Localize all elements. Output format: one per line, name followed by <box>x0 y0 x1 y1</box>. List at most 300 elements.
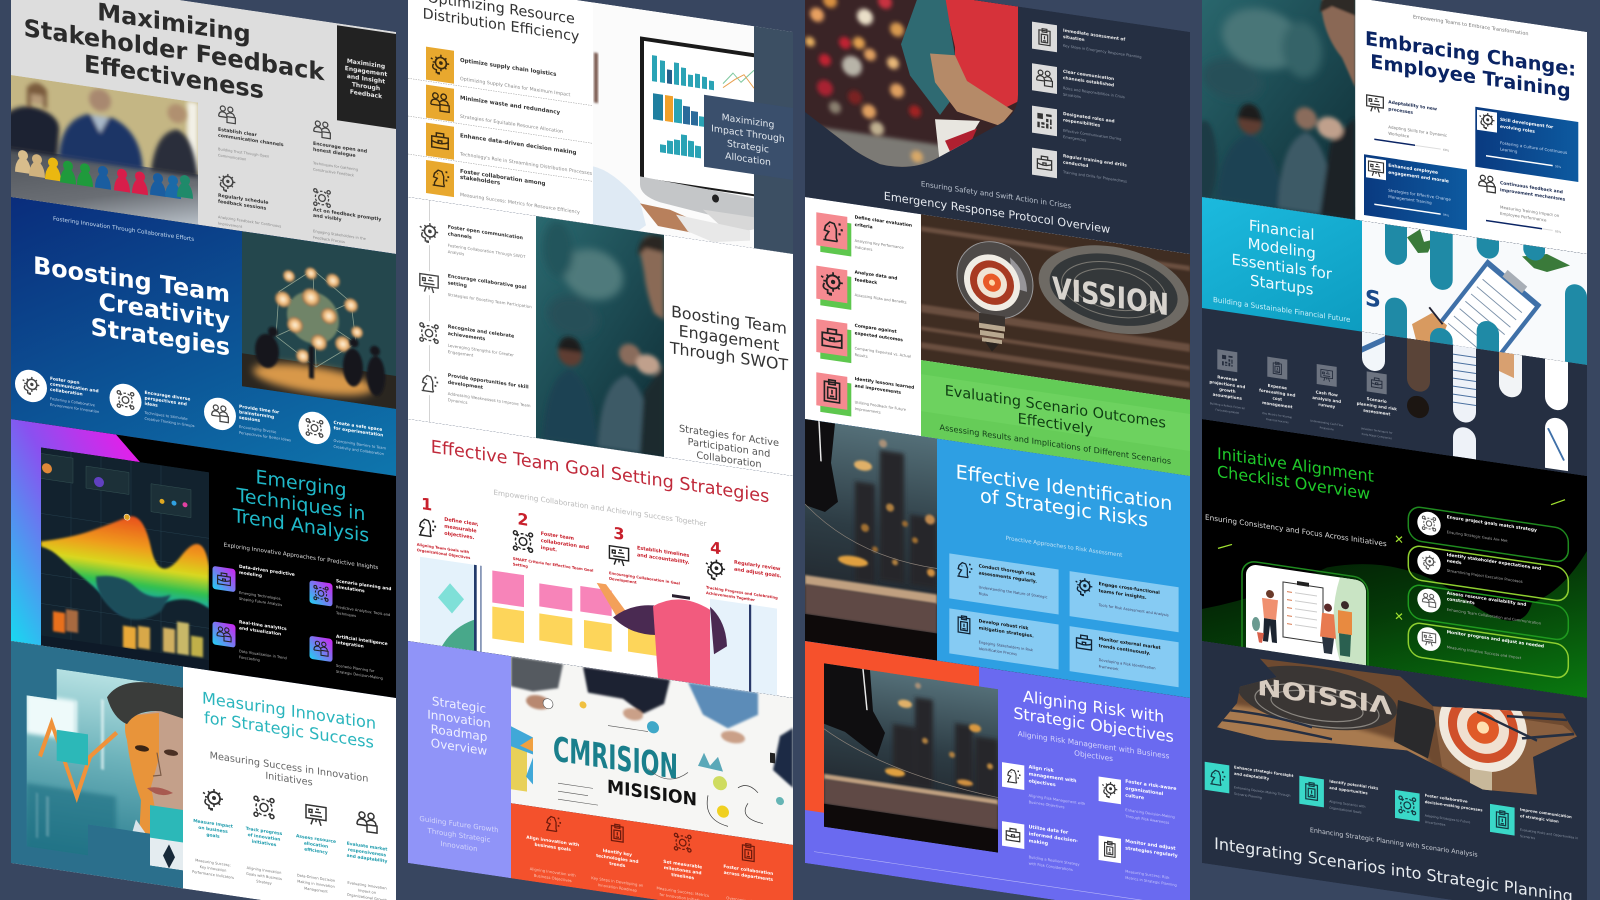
slide: Maximizing Stakeholder Feedback Effectiveness <box>6 0 396 254</box>
photo: city bridge at night <box>824 663 998 853</box>
item: act on feedback promptly and visibly: Engaging Stakeholders in the <box>313 229 366 241</box>
item 3: timelines <box>671 872 695 881</box>
title: Techniques in <box>236 484 365 525</box>
slide: Boosting Team Engagement Through SWOT <box>408 197 793 476</box>
item 2 <box>246 795 283 887</box>
item 2: Foster a risk-aware <box>1125 780 1176 792</box>
item: establish clear communication channels: Communication <box>218 153 246 162</box>
item 1: Enhance strategic foresight <box>1234 764 1293 778</box>
step 3: Development <box>609 577 637 585</box>
teal left panel <box>11 641 183 888</box>
subtitle: Measuring Success in Innovation <box>210 750 368 785</box>
card 2 <box>1070 571 1179 632</box>
item: act on feedback promptly and visibly <box>313 188 381 250</box>
item 4: Strategic Decision-Making <box>336 670 383 681</box>
item 1 <box>1209 348 1245 416</box>
step 4 <box>706 537 782 606</box>
card 4: Monitor external market <box>1099 637 1161 651</box>
slide: Effective Identification of Strategic Risks <box>805 419 1190 698</box>
subtitle: Enhancing Strategic Planning with Scenario Analysis <box>1310 826 1478 859</box>
card 3: Engaging Stakeholders in Risk <box>979 640 1033 652</box>
item 1 <box>1205 760 1294 804</box>
card 1: assessments regularly. <box>979 570 1037 585</box>
item 4: Foster collaboration among <box>460 169 545 187</box>
item 2: Techniques <box>335 611 356 618</box>
doodle word: CMRISION: CMRISION <box>553 729 678 788</box>
item 2: Aligning Scenarios with <box>1329 799 1365 809</box>
check pill 3 <box>1408 584 1568 641</box>
slide background <box>1202 641 1587 900</box>
item 3: Encouraging Diverse <box>239 425 276 434</box>
item: encourage open and honest dialogue <box>312 120 367 180</box>
subtitle: Objectives <box>1074 748 1113 763</box>
title: Checklist Overview <box>1217 462 1370 503</box>
item 3 <box>296 803 336 895</box>
item 1: goals <box>206 832 220 840</box>
slide background <box>1202 197 1587 476</box>
item 3: runway <box>1318 402 1335 409</box>
item 1 <box>212 564 294 606</box>
photo: city bridge at night <box>805 419 937 661</box>
item 1: projections and <box>1209 379 1245 389</box>
cyan title panel <box>1202 197 1362 332</box>
slide background <box>1202 0 1587 254</box>
title: Strategic Objectives <box>1013 703 1174 746</box>
item 1: Shaping Future Analysis <box>239 597 282 607</box>
orange accent <box>805 641 979 836</box>
item 4: Scenarios <box>1520 834 1535 840</box>
card 4: Developing a Risk Identification <box>1099 658 1156 670</box>
title: Strategic <box>432 694 486 716</box>
item 4 <box>426 160 580 216</box>
item 1: criteria <box>855 222 873 231</box>
item 3: Making in Innovation <box>297 879 335 889</box>
title: Strategies <box>91 313 230 361</box>
column 4 of slides <box>1193 0 1587 900</box>
card 3: Identification Process <box>979 647 1017 656</box>
step 3: 3 <box>613 523 625 544</box>
item 1 <box>417 219 526 266</box>
item 2: management <box>1262 400 1293 409</box>
subtitle: Fostering Innovation Through Collaborative Efforts <box>53 215 194 243</box>
item 1: Business Objectives <box>1029 800 1065 809</box>
item 4: assessment <box>1363 408 1390 417</box>
check pill 4 <box>1408 622 1568 679</box>
illustration: person at sticky-note board <box>420 556 777 696</box>
card 4: Employee Performance <box>1500 211 1547 223</box>
card 1 <box>1367 95 1450 153</box>
item 1: Building a Robust Financial <box>1210 402 1245 410</box>
item 2 <box>110 382 195 428</box>
item: encourage open and honest dialogue: Encourage open and <box>313 142 367 155</box>
item 3: Foster collaborative <box>1425 793 1468 804</box>
slide: Effective Team Goal Setting Strategies <box>408 419 793 698</box>
item 2: Creative Thinking in Groups <box>144 417 195 428</box>
item 2 <box>1032 63 1125 106</box>
callout: maximizing impact <box>704 95 793 180</box>
green title band <box>921 360 1190 476</box>
item 4: and improvements <box>855 383 901 396</box>
card 3: Develop robust risk <box>979 619 1028 632</box>
item 3: making <box>1029 838 1048 847</box>
photo: blurred team with pointing man <box>536 216 664 457</box>
illustration: team with checklist <box>1242 560 1368 702</box>
item 2: setting <box>448 280 467 289</box>
item 4: development <box>448 380 484 391</box>
item 3: Engagement <box>448 349 474 358</box>
item 2: Assessing Risks and Benefits <box>855 293 907 305</box>
item 1: Foster open <box>50 377 79 386</box>
item 2: trends <box>609 861 626 869</box>
item 3: milestones and <box>664 865 702 876</box>
title <box>35 256 230 355</box>
subtitle: Participation and <box>688 437 770 460</box>
title: Boosting Team <box>671 302 787 338</box>
item 3: achievements <box>448 331 485 342</box>
item 3 <box>204 396 291 442</box>
card 3: Management Training <box>1388 194 1432 205</box>
step 2: SMART Criteria for Effective Team Goal <box>513 557 593 573</box>
subtitle: Innovation <box>440 840 478 853</box>
step 4: 4 <box>710 538 721 558</box>
subtitle: Ensuring Consistency and Focus Across Initiatives <box>1205 512 1387 548</box>
card 3: Strategies for Effective Change <box>1388 188 1451 202</box>
check pill 2: Streamlining Project Execution Processes <box>1447 569 1523 584</box>
item 3: Real-time analytics <box>239 620 287 632</box>
item 4: Evaluating Innovation <box>347 881 387 891</box>
step 3 <box>609 523 690 593</box>
item 4: Scenario <box>1367 396 1387 404</box>
item 3: informed decision- <box>1029 831 1078 844</box>
title: Through SWOT <box>669 338 788 375</box>
item 1: Data-driven predictive <box>239 565 295 578</box>
teal accent squares <box>57 730 183 842</box>
item 1: Key Steps in Emergency Response Planning <box>1063 44 1142 59</box>
item 3: with Risk Considerations <box>1029 861 1073 872</box>
title: Overview <box>431 736 487 758</box>
item 4 <box>347 810 387 900</box>
item 4 <box>1357 370 1397 441</box>
subtitle: Initiatives <box>265 771 313 789</box>
card 4 <box>1070 626 1179 687</box>
item 4 <box>723 840 773 900</box>
card 2 <box>1475 107 1578 182</box>
item: establish clear communication channels: Establish clear <box>218 128 257 138</box>
title: Engagement <box>679 321 779 355</box>
dark subtitle box: Through <box>352 81 380 92</box>
item: encourage open and honest dialogue: honest dialogue <box>313 147 356 159</box>
item 1: and adaptability <box>1234 771 1270 781</box>
item 2: Key Metrics for Startup <box>1262 412 1292 419</box>
item 3: sessions <box>239 415 260 424</box>
item 4: Evaluating Risks and Opportunities in <box>1520 828 1578 840</box>
item 3: efficiency <box>304 846 328 856</box>
item 1: collaboration <box>50 387 83 398</box>
item: act on feedback promptly and visibly: and visibly <box>313 213 342 223</box>
card 4: Continuous feedback and <box>1500 181 1563 195</box>
card 2: Fostering a Culture of Continuous <box>1500 140 1567 155</box>
card 2: 95% <box>1555 164 1562 169</box>
item 1: assumptions <box>1213 392 1242 401</box>
item 1: Fostering a Collaborative <box>50 397 95 407</box>
callout: maximizing impact: Maximizing <box>722 112 774 131</box>
title: Effectiveness <box>84 50 264 104</box>
item 2: Key Steps in Developing an <box>591 875 643 888</box>
callout: maximizing impact: Impact Through <box>711 123 785 145</box>
dashed row dividers <box>408 78 593 181</box>
photo: target bulb and VISSION sign on wood <box>921 214 1190 400</box>
item 1 <box>15 368 99 414</box>
slide: Boosting Team Creativity Strategies <box>11 197 396 476</box>
doodle sketches <box>543 695 784 835</box>
item 2 <box>591 821 644 894</box>
item 4: Early-Stage Companies <box>1362 433 1392 440</box>
item: regularly schedule feedback sessions: Regularly schedule <box>218 194 268 206</box>
card 2: evolving roles <box>1500 124 1535 135</box>
item 4: Regular training and drills <box>1063 154 1127 169</box>
item 3: Measuring Success: Metrics <box>656 885 709 898</box>
item 4: of strategic vision <box>1520 813 1559 824</box>
photo: glowing bulb sculpture <box>242 231 396 409</box>
slide: Initiative Alignment Checklist Overview <box>1202 419 1587 734</box>
item 1: growth <box>1219 387 1236 394</box>
item 4 <box>417 368 531 414</box>
item 4: conducted <box>1063 159 1088 169</box>
item 2: Encourage diverse <box>144 391 190 403</box>
check pill 2: needs <box>1447 558 1462 566</box>
card 1: 60% <box>1443 148 1450 153</box>
item 2: Strategy <box>256 879 273 886</box>
dark subtitle box <box>337 25 396 129</box>
item 3: Forecasting <box>239 655 260 662</box>
item 4: Artificial intelligence <box>336 635 388 647</box>
item: encourage open and honest dialogue: Techniques for Gathering <box>313 161 358 172</box>
item 3 <box>816 317 911 372</box>
item 4 <box>816 370 914 426</box>
slide background <box>11 197 396 476</box>
column 3 of slides <box>805 0 1190 900</box>
title: Employee Training <box>1370 50 1571 103</box>
subtitle: Empowering Teams to Embrace Transformation <box>1413 14 1528 37</box>
step 1: Define clear, <box>444 517 479 528</box>
check pill 4: Monitor progress and adjust as needed <box>1447 629 1544 650</box>
item 3: Cash flow <box>1316 389 1338 398</box>
green glow shape <box>1202 494 1587 698</box>
chart illustration <box>33 446 209 670</box>
card 1: Workplace <box>1388 131 1410 139</box>
step 2 <box>513 508 593 578</box>
title: of Strategic Risks <box>980 484 1148 532</box>
item 3: Adapting Strategies to Future <box>1425 814 1470 824</box>
dark subtitle box: Feedback <box>350 89 383 100</box>
item 4: Create a safe space <box>334 421 382 433</box>
item 4: Impact on <box>358 888 376 895</box>
item 4: Overcoming Barriers to Team <box>334 439 386 450</box>
card 4 <box>1479 175 1566 235</box>
item 4 <box>298 410 386 457</box>
timeline line <box>428 200 431 422</box>
title: Emergency Response Protocol Overview <box>884 190 1110 236</box>
item: establish clear communication channels <box>218 105 284 160</box>
step 1: Organizational Objectives <box>417 548 471 560</box>
item 4: Identify lessons learned <box>855 377 914 391</box>
item 4: Improvements <box>855 407 881 415</box>
item 1: communication and <box>50 381 99 394</box>
item 2: Scenario planning and <box>336 579 391 592</box>
item 2: Roles and Responsibilities in Crisis <box>1063 86 1125 99</box>
slide: Evaluating Scenario Outcomes Effectively <box>805 197 1190 476</box>
slide: Financial Modeling Essentials for Startups <box>1202 197 1587 476</box>
item 1: Key Innovation <box>200 865 226 873</box>
subtitle: Building a Sustainable Financial Future <box>1213 295 1350 324</box>
title: Essentials for <box>1231 250 1333 283</box>
photo: iMac dashboard <box>593 2 754 248</box>
slide background <box>11 641 396 900</box>
card 4: improvement mechanisms <box>1500 187 1566 203</box>
item 4: Addressing Weaknesses to Improve Team <box>448 391 531 408</box>
item 1: Immediate assessment of <box>1063 29 1125 43</box>
item 1: Fostering Collaboration Through SWOT <box>448 243 525 259</box>
item 3: analysis and <box>1312 395 1341 404</box>
item 1: on business <box>198 825 228 835</box>
item: regularly schedule feedback sessions <box>218 174 281 228</box>
title: Effective Team Goal Setting Strategies <box>431 437 769 507</box>
item 1: Enhancing Decision-Making Through <box>1234 785 1290 798</box>
item 4: Creativity and Collaboration <box>334 445 384 456</box>
item 2: simulations <box>336 584 365 594</box>
item 4: Utilizing Feedback for Future <box>855 400 906 412</box>
brush-stroke photo: flipped VISSION and target <box>1202 641 1587 818</box>
slide: Emergency Response Protocol Overview <box>805 0 1190 254</box>
title: Initiative Alignment <box>1217 444 1374 486</box>
title: Aligning Risk with <box>1023 687 1164 727</box>
item 2: organizational <box>1125 786 1164 797</box>
item 4: Metrics in Strategic Planning <box>1125 876 1177 887</box>
step 1: 1 <box>421 494 432 515</box>
item 1: Optimizing Supply Chains for Maximum Impact <box>460 76 571 98</box>
item 4: planning and risk <box>1357 401 1397 412</box>
dark subtitle box: and Insight <box>347 73 385 86</box>
title: Financial <box>1249 216 1315 244</box>
item 2 <box>426 85 563 138</box>
step 1: Aligning Team Goals with <box>417 543 469 554</box>
item 3: expected outcomes <box>855 330 903 343</box>
item 3: Uncertainties <box>1425 820 1446 827</box>
item 1 <box>526 813 579 884</box>
title: Emerging <box>255 466 347 502</box>
slide background <box>805 0 1190 254</box>
item 2: initiatives <box>252 839 277 848</box>
card 4: trends continuously. <box>1099 643 1151 657</box>
item 2: technologies and <box>596 853 639 865</box>
item 2: feedback <box>855 277 877 286</box>
item 4: Monitor and adjust <box>1125 839 1176 852</box>
step 2: Foster team <box>541 531 574 542</box>
item 4: Evaluate market <box>347 842 387 853</box>
slide: Aligning Risk with Strategic Objectives <box>805 641 1190 900</box>
check pill 1 <box>1408 506 1568 563</box>
card 3: Enhanced employee <box>1388 164 1438 176</box>
neon gradient accent <box>11 419 140 660</box>
item 4 <box>1099 834 1178 888</box>
slide background <box>408 0 793 254</box>
item 2: Enhancing Decision-Making <box>1125 808 1175 819</box>
photo: blurred team with pointing man <box>1193 0 1355 223</box>
dark subtitle box: Maximizing <box>347 58 385 70</box>
check pill 3: constraints <box>1447 596 1475 606</box>
item 4: Scenario Planning for <box>336 664 374 673</box>
item 2: Minimize waste and redundancy <box>460 94 560 116</box>
step 4: Regularly review <box>734 560 780 572</box>
item 4: Dynamics <box>448 397 467 405</box>
photo strips: clipboard on desk <box>1362 221 1587 476</box>
item 1: Align risk <box>1029 765 1054 774</box>
item 1: Define clear evaluation <box>855 215 912 229</box>
step 2: 2 <box>517 509 529 530</box>
lavender side panel <box>408 641 511 878</box>
item 4 <box>310 634 388 680</box>
item 2: perspectives and <box>144 395 187 408</box>
photo: mission doodle table <box>511 656 793 845</box>
card 4: Framework <box>1099 664 1119 672</box>
item 2 <box>310 579 392 617</box>
item 3: Projections <box>1320 426 1334 432</box>
item 2: Situations <box>1063 92 1081 99</box>
card 1: Adapting Skills for a Dynamic <box>1388 124 1447 138</box>
item 4: responsiveness <box>348 847 387 859</box>
item: regularly schedule feedback sessions: feedback sessions <box>218 199 267 212</box>
item 1 <box>192 786 234 880</box>
slide: Optimizing Resource Distribution Efficiency <box>408 0 793 254</box>
dark subtitle box: Engagement <box>345 65 387 78</box>
item: act on feedback promptly and visibly: Feedback Process <box>313 235 345 244</box>
item 4: Measuring Success: Risk <box>1125 869 1169 880</box>
item 4 <box>1032 148 1127 189</box>
item 2: Techniques to Stimulate <box>144 411 188 421</box>
subtitle: Ensuring Safety and Swift Action in Crises <box>921 179 1071 210</box>
item: regularly schedule feedback sessions: Improvement <box>218 221 243 229</box>
title: Effectively <box>1018 411 1093 438</box>
item 2: Goals with Business <box>246 872 282 881</box>
card 1: Adaptability to new <box>1388 100 1437 112</box>
item 3 <box>1032 106 1121 148</box>
item 1 <box>426 47 571 101</box>
title: Creativity <box>98 287 230 335</box>
subtitle: Guiding Future Growth <box>419 815 499 834</box>
item 3: Data-Driven Decision <box>297 873 335 883</box>
item 1: management with <box>1029 771 1076 784</box>
step 2: input. <box>541 545 557 553</box>
item 4: Training and Drills for Preparedness <box>1062 170 1127 184</box>
step 2: collaboration and <box>541 538 590 551</box>
item 3: Building a Resilient Strategy <box>1029 855 1080 867</box>
step 4: Achievements Together <box>706 591 755 602</box>
item 4 <box>1490 802 1578 847</box>
item 2: forecasting and <box>1259 387 1295 398</box>
check pill 1: Ensuring Strategic Goals Are Met <box>1447 530 1508 543</box>
slide: Integrating Scenarios into Strategic Planning <box>1202 641 1587 900</box>
item 1: Measuring Success: <box>195 858 231 868</box>
item 3: Designated roles and <box>1063 112 1115 125</box>
item 2: Innovation Roadmap <box>598 882 638 893</box>
item 3: decision-making processes <box>1425 799 1483 813</box>
slide background <box>408 197 793 476</box>
check pill 1: Ensure project goals match strategy <box>1447 514 1537 534</box>
item 2: cost <box>1272 395 1282 402</box>
card 1: processes <box>1388 107 1413 116</box>
card 3 <box>1364 154 1467 230</box>
title: for Strategic Success <box>204 708 374 752</box>
